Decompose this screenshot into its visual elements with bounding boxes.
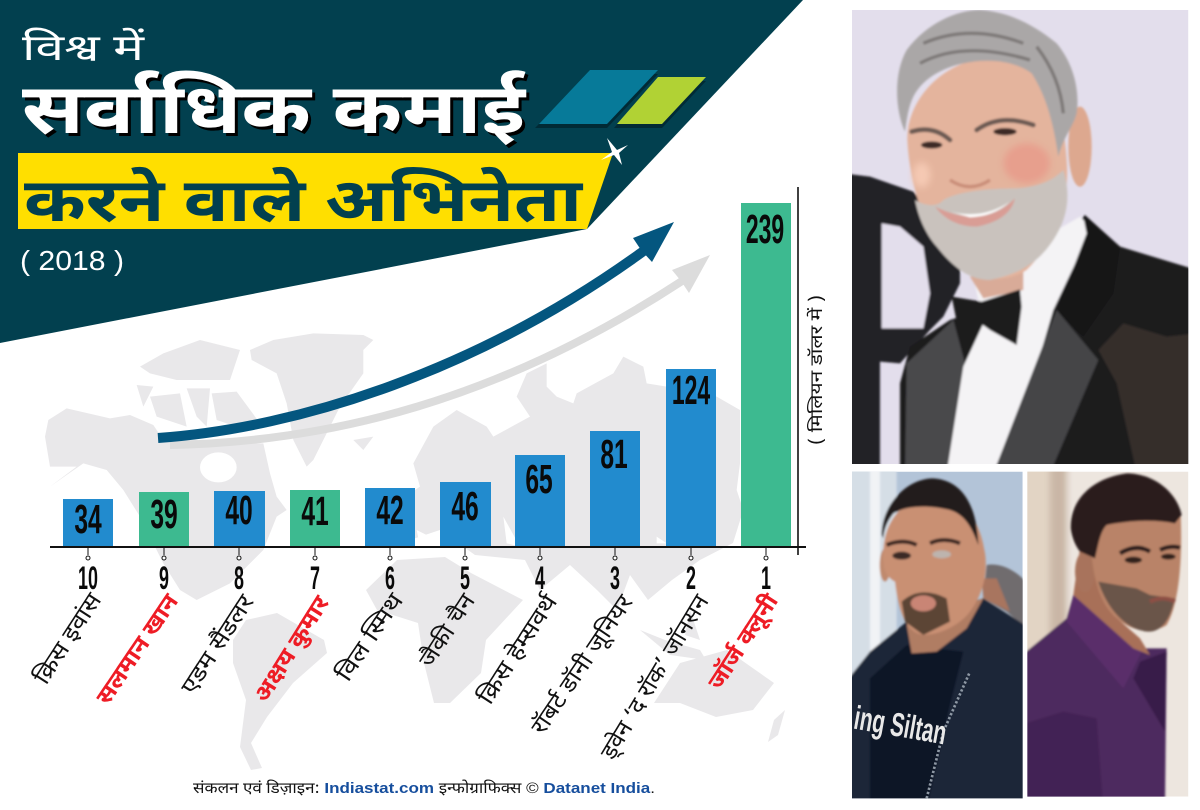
bar: 5 Jackie Chan bbox=[440, 482, 491, 547]
actor names: रॉबर्ट डॉनी जूनियर bbox=[526, 589, 642, 742]
photo: Salman Khan bbox=[852, 472, 1023, 798]
footer credit: संकलन एवं डिज़ाइन: Indiastat.com इन्फोग्राफिक्स © Datanet India . bbox=[193, 780, 655, 800]
bar: 6 Will Smith bbox=[365, 488, 415, 547]
bar: 4 Chris Hemsworth: 65 bbox=[525, 457, 553, 503]
photo: Salman Khan: ing Siltan bbox=[851, 699, 949, 752]
actor names bbox=[29, 588, 788, 767]
world map background bbox=[45, 333, 785, 770]
rank numbers: 2 bbox=[686, 562, 696, 596]
bar: 5 Jackie Chan: 46 bbox=[451, 484, 479, 530]
bar: 1 George Clooney bbox=[741, 203, 791, 547]
actor names: जैकी चैन bbox=[413, 588, 485, 674]
title: line 3: करने वाले अभिनेता bbox=[24, 168, 584, 246]
bar: 8 Adam Sandler bbox=[214, 488, 265, 547]
actor names: विल स्मिथ bbox=[331, 588, 413, 689]
blue growth arrow bbox=[158, 222, 674, 438]
bar chart bbox=[63, 203, 791, 547]
bar: 7 Akshay Kumar bbox=[290, 489, 340, 547]
rank numbers: 1 bbox=[761, 562, 771, 596]
bar: 1 George Clooney: 239 bbox=[746, 207, 784, 253]
header banner bbox=[0, 0, 803, 343]
rank numbers: 5 bbox=[460, 562, 470, 596]
bar: 9 Salman Khan bbox=[139, 492, 189, 547]
bar: 6 Will Smith: 42 bbox=[376, 488, 404, 534]
bar: 10 Chris Evans: 34 bbox=[74, 497, 102, 543]
bar: 2 Dwayne Johnson bbox=[666, 368, 716, 547]
rank numbers bbox=[78, 562, 771, 596]
rank numbers: 9 bbox=[159, 562, 169, 596]
bar: 4 Chris Hemsworth bbox=[515, 455, 565, 547]
rank numbers: 8 bbox=[234, 562, 244, 596]
bar: 8 Adam Sandler: 40 bbox=[225, 488, 253, 534]
bar: 7 Akshay Kumar: 41 bbox=[301, 489, 329, 535]
grey growth arrow bbox=[170, 255, 710, 445]
actor names: क्रिस इवांस bbox=[29, 588, 111, 691]
bar: 10 Chris Evans bbox=[63, 497, 113, 547]
actor names: ड्वेन ‘द रॉक’ जॉनसन bbox=[594, 589, 719, 767]
bar: 3 Robert Downey Jr: 81 bbox=[600, 432, 628, 478]
bar: 9 Salman Khan: 39 bbox=[150, 492, 178, 538]
photo: Akshay Kumar bbox=[1020, 462, 1188, 808]
rank numbers: 7 bbox=[310, 562, 320, 596]
bar: 3 Robert Downey Jr bbox=[590, 431, 640, 547]
title: line 1: विश्व में bbox=[22, 27, 146, 75]
rank numbers: 4 bbox=[535, 562, 545, 596]
title: line 2: सर्वाधिक कमाई bbox=[22, 70, 527, 162]
unit label: ( मिलियन डॉलर में ) bbox=[806, 295, 829, 445]
photo: George Clooney bbox=[843, 10, 1197, 473]
rank numbers: 3 bbox=[610, 562, 620, 596]
actor names: जॉर्ज क्लूनी bbox=[702, 588, 788, 696]
actor names: सलमान खान bbox=[91, 589, 188, 712]
actor names: अक्षय कुमार bbox=[249, 591, 339, 709]
actor names: क्रिस हेम्सवर्थ bbox=[472, 588, 567, 711]
sparkle star bbox=[601, 138, 628, 165]
year: ( 2018 ) bbox=[20, 245, 124, 276]
decorative parallelograms bbox=[535, 70, 706, 128]
chart axes bbox=[50, 187, 806, 560]
title: yellow band bbox=[18, 153, 613, 229]
actor names: एडम सैंडलर bbox=[175, 589, 263, 701]
rank numbers: 6 bbox=[385, 562, 395, 596]
bar: 2 Dwayne Johnson: 124 bbox=[672, 368, 711, 414]
rank numbers: 10 bbox=[78, 562, 98, 596]
